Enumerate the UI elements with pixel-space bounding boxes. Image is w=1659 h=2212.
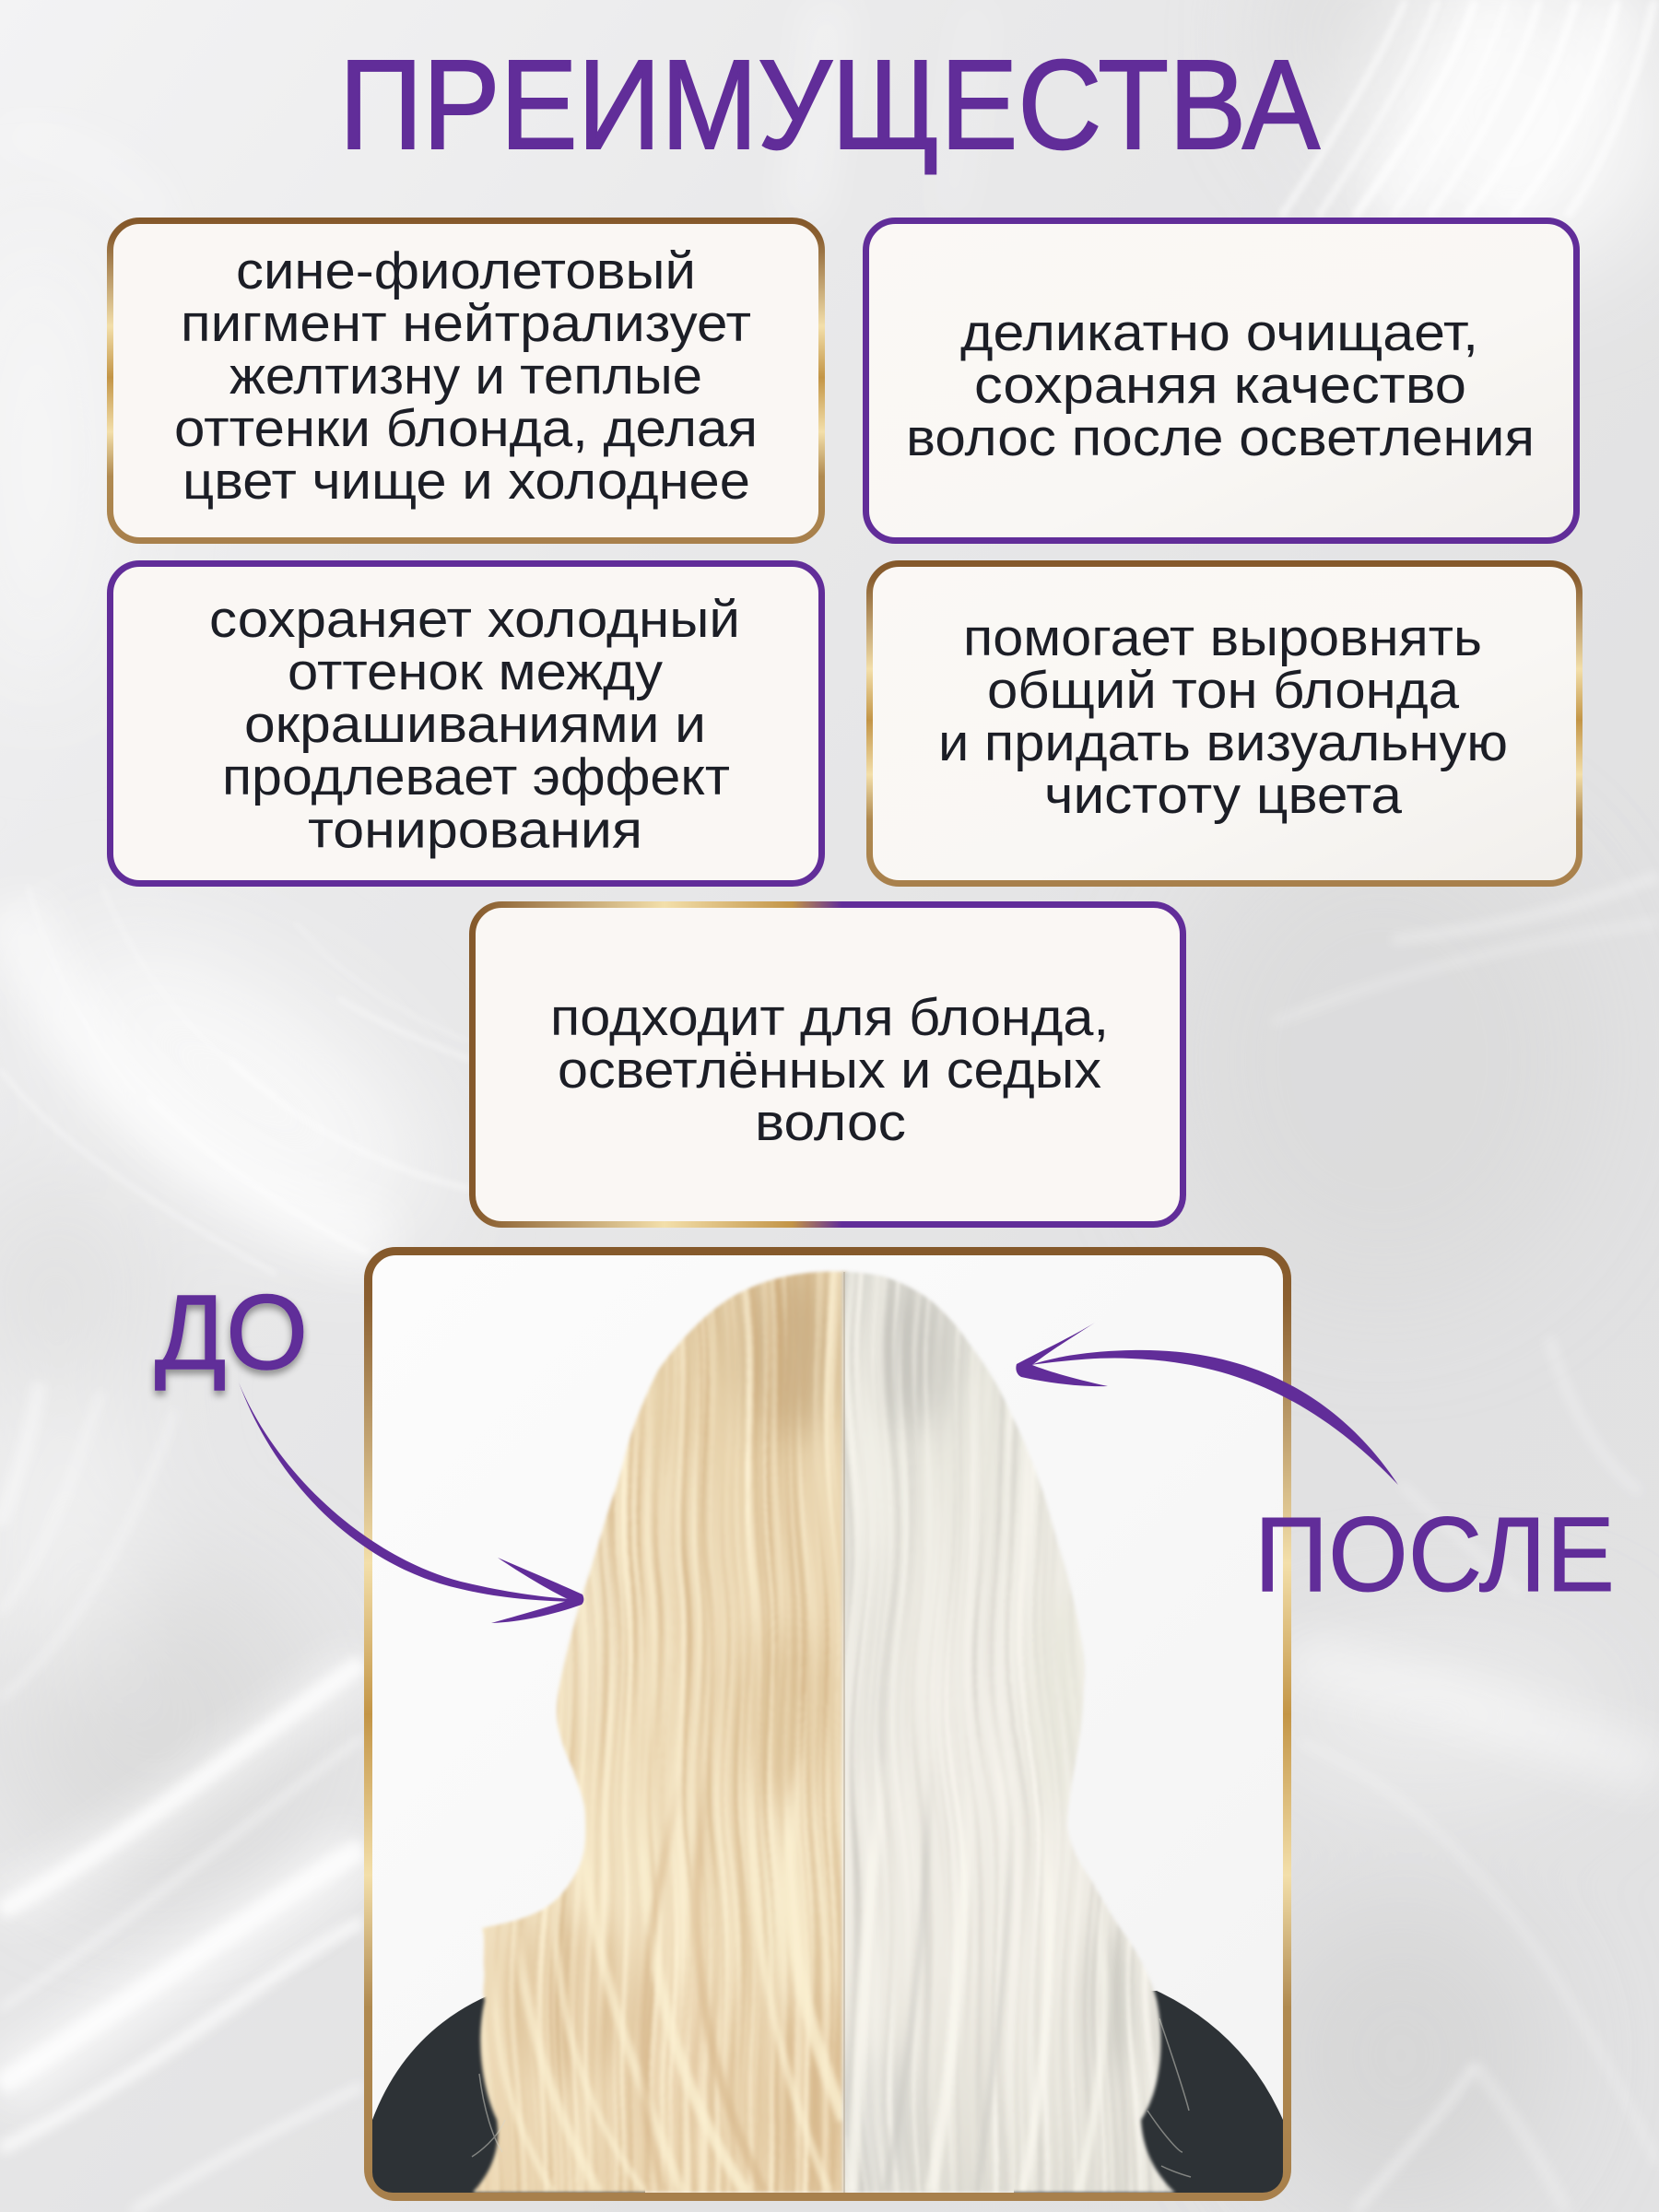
panel: keeps cool shade benefit: продлевает эффект	[222, 747, 730, 806]
after label: ПОСЛЕ	[1254, 1496, 1615, 1614]
before label: ДО	[155, 1274, 308, 1392]
panel: evens out tone benefit: чистоту цвета	[1044, 766, 1402, 825]
arrow: before to hair	[239, 1382, 583, 1623]
panel: evens out tone benefit: помогает выровнять	[963, 608, 1482, 667]
panel: gentle cleansing benefit: сохраняя качество	[974, 356, 1466, 415]
panel: blue-violet pigment benefit: сине-фиолетовый	[236, 241, 696, 300]
panel: gentle cleansing benefit: деликатно очищает,	[960, 303, 1478, 362]
panel: suitable hair types benefit: осветлённых и седых	[558, 1041, 1101, 1100]
panel: evens out tone benefit: и придать визуальную	[938, 713, 1508, 772]
panel: before and after hair photo	[369, 1198, 1287, 2212]
panel: blue-violet pigment benefit	[111, 221, 822, 540]
panel: keeps cool shade benefit: сохраняет холодный	[209, 590, 740, 649]
panel: keeps cool shade benefit	[111, 564, 822, 883]
arrow: after to hair	[1016, 1323, 1398, 1485]
hair: before side	[472, 1269, 846, 2193]
panel: blue-violet pigment benefit: оттенки блонда, делая	[174, 399, 758, 458]
panel: gentle cleansing benefit: волос после осветления	[906, 408, 1535, 467]
panel: keeps cool shade benefit: тонирования	[308, 800, 642, 859]
panel: suitable hair types benefit: волос	[755, 1093, 906, 1152]
center parting seam	[843, 1272, 845, 2193]
panel: keeps cool shade benefit: окрашиваниями и	[244, 695, 706, 754]
panel: blue-violet pigment benefit: цвет чище и холоднее	[182, 452, 750, 511]
title: ПРЕИМУЩЕСТВА	[339, 34, 1320, 176]
panel: keeps cool shade benefit: оттенок между	[288, 642, 664, 701]
wispy strands on shoulders	[472, 2018, 1191, 2177]
panel: blue-violet pigment benefit: пигмент нейтрализует	[181, 294, 751, 353]
panel: gentle cleansing benefit	[866, 221, 1576, 540]
panel: blue-violet pigment benefit: желтизну и теплые	[229, 347, 702, 406]
panel: suitable hair types benefit: подходит для блонда,	[550, 988, 1109, 1047]
panel: evens out tone benefit	[870, 564, 1580, 883]
hair: after side	[841, 1270, 1176, 2193]
dark shoulders	[369, 1991, 1287, 2193]
panel: suitable hair types benefit	[472, 905, 1183, 1224]
panel: evens out tone benefit: общий тон блонда	[987, 661, 1459, 720]
